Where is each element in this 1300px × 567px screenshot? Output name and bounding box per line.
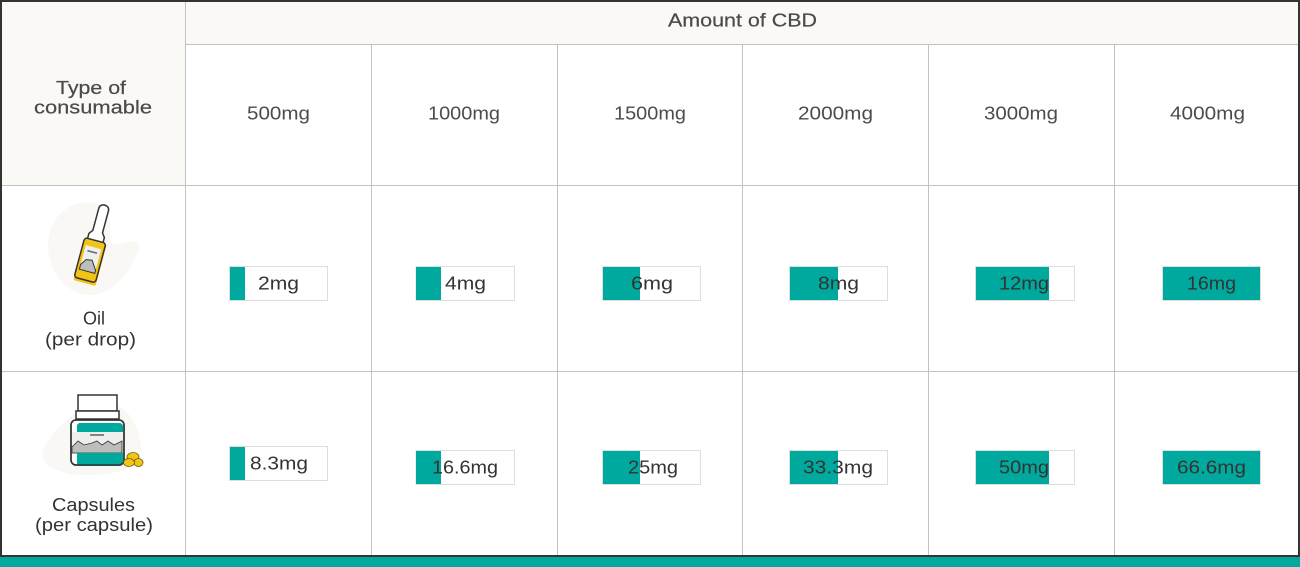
- bar: capsules 3000mg 50mg: [976, 450, 1074, 484]
- bar: capsules 2000mg 33.3mg: [790, 450, 888, 484]
- label: capsules per capsule: (per capsule): [35, 515, 153, 535]
- bar: capsules 500mg 8.3mg: 8.3mg: [250, 454, 308, 474]
- bar: oil 1000mg 4mg: 4mg: [445, 274, 486, 294]
- heading: type of consumable: Type of: [56, 78, 127, 98]
- bar: capsules 4000mg 66.6mg: 66.6mg: [1177, 458, 1246, 478]
- label: oil per drop: [45, 308, 136, 350]
- panel: header background: [2, 2, 1298, 185]
- label: oil per drop: Oil: [83, 308, 105, 328]
- column headings: CBD amounts: 2000mg: [798, 104, 873, 124]
- column headings: CBD amounts: 1500mg: [614, 104, 686, 124]
- icon: oil dropper bottle: [48, 202, 139, 295]
- label: capsules per capsule: [35, 495, 153, 535]
- heading: type of consumable: [34, 78, 152, 118]
- icon: capsule jar: [43, 395, 143, 475]
- bar: oil 1500mg 6mg: [602, 266, 700, 300]
- label: capsules per capsule: Capsules: [52, 495, 135, 515]
- bar: capsules 1000mg 16.6mg: [416, 450, 514, 484]
- bar: oil 3000mg 12mg: [976, 266, 1074, 300]
- bar: oil 2000mg 8mg: 8mg: [818, 274, 859, 294]
- bar: capsules 4000mg 66.6mg: [1162, 450, 1260, 484]
- heading: type of consumable: consumable: [34, 98, 152, 118]
- bar: capsules 3000mg 50mg: 50mg: [999, 458, 1049, 478]
- bar: oil 500mg 2mg: [230, 266, 328, 300]
- column headings: CBD amounts: 3000mg: [984, 104, 1058, 124]
- column headings: CBD amounts: 1000mg: [428, 104, 500, 124]
- bar: capsules 1500mg 25mg: [602, 450, 700, 484]
- column headings: CBD amounts: [247, 104, 1245, 124]
- bar: oil 3000mg 12mg: 12mg: [999, 274, 1049, 294]
- bar: capsules 1500mg 25mg: 25mg: [628, 458, 678, 478]
- bar: oil 4000mg 16mg: [1162, 266, 1260, 300]
- bar: oil 4000mg 16mg: 16mg: [1187, 274, 1236, 294]
- bar: oil 2000mg 8mg: [790, 266, 888, 300]
- footer teal band: [0, 557, 1300, 567]
- bar: capsules 2000mg 33.3mg: 33.3mg: [803, 458, 873, 478]
- column headings: CBD amounts: 500mg: [247, 104, 310, 124]
- bar: oil 500mg 2mg: 2mg: [258, 274, 299, 294]
- bar: capsules 1000mg 16.6mg: 16.6mg: [432, 458, 498, 478]
- bar: oil 1000mg 4mg: [416, 266, 514, 300]
- heading: amount of CBD: Amount of CBD: [668, 10, 817, 30]
- bar: oil 1500mg 6mg: 6mg: [631, 274, 673, 294]
- bar: capsules 500mg 8.3mg: [230, 446, 328, 480]
- column headings: CBD amounts: 4000mg: [1170, 104, 1245, 124]
- label: oil per drop: (per drop): [45, 330, 136, 350]
